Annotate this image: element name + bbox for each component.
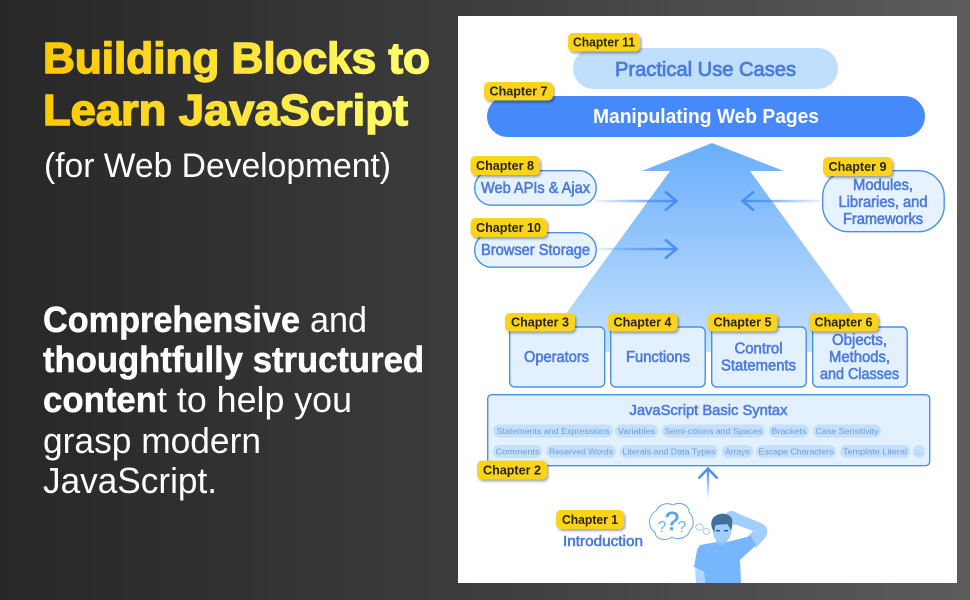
description text block: thoughtfully structured — [43, 339, 424, 380]
arrow: web apis — [596, 192, 676, 210]
tag: chapter 9: Chapter 9 — [828, 160, 887, 174]
pill: browser storage — [475, 233, 596, 267]
tag: chapter 10 — [470, 218, 547, 237]
box: javascript basic syntax — [488, 395, 930, 466]
title: Learn JavaScript — [43, 86, 408, 135]
pill: manipulating web pages: Manipulating Web Pages — [593, 105, 819, 128]
box: operators — [510, 327, 605, 387]
tag: chapter 8: Chapter 8 — [476, 159, 534, 173]
subtitle: (for Web Development) — [44, 147, 391, 185]
pill: modules, libraries, frameworks — [823, 171, 944, 232]
box: control statements: Control — [734, 340, 782, 358]
box: objects, methods, classes — [813, 327, 907, 387]
chips: row one: Case Sensitivity — [816, 426, 879, 436]
icon: thought cloud: ? — [665, 506, 679, 536]
description text block: t to help you — [157, 379, 352, 420]
big upward arrow — [538, 143, 882, 352]
box: objects, methods, classes: and Classes — [820, 366, 899, 383]
tag: chapter 4 — [608, 313, 678, 332]
box: objects, methods, classes: Methods, — [829, 349, 890, 366]
tag: chapter 1: Chapter 1 — [562, 513, 618, 527]
tag: chapter 2: Chapter 2 — [483, 464, 541, 478]
icon: thought cloud: ? — [678, 519, 687, 536]
pill: manipulating web pages — [487, 96, 925, 137]
chips: row two — [493, 445, 925, 458]
chips: row two: ... — [915, 446, 923, 456]
pill: web apis and ajax — [475, 171, 596, 205]
box: control statements: Statements — [721, 358, 796, 374]
box: operators: Operators — [524, 349, 589, 366]
tag: chapter 9 — [823, 157, 892, 176]
tag: chapter 11: Chapter 11 — [573, 36, 635, 50]
chips: row two: Reserved Words — [549, 446, 613, 456]
title — [43, 34, 430, 135]
arrow: browser storage — [596, 240, 676, 258]
box: objects, methods, classes: Objects, — [832, 332, 887, 349]
chips: row two: Escape Characters — [758, 446, 834, 456]
chips: row one: Statements and Expressions — [496, 426, 610, 436]
chips: row two: Arrays — [725, 446, 750, 456]
chips: row one: Semi-colons and Spaces — [664, 426, 762, 436]
box: javascript basic syntax: JavaScript Basic Syntax — [630, 402, 788, 419]
pill: browser storage: Browser Storage — [481, 242, 590, 259]
box: control statements — [712, 327, 806, 387]
arrow: introduction to syntax — [698, 468, 718, 499]
title: Building Blocks to — [43, 34, 430, 83]
chips: row two: Comments — [496, 446, 540, 456]
description text block: grasp modern — [43, 420, 261, 461]
tag: chapter 5: Chapter 5 — [714, 316, 772, 330]
chips: row one: Variables — [618, 426, 655, 436]
pill: modules, libraries, frameworks: Frameworks — [843, 211, 923, 228]
tag: chapter 1 — [556, 510, 624, 529]
panel: learning diagram — [458, 16, 957, 583]
pill: modules, libraries, frameworks: Libraries, and — [838, 194, 928, 211]
chips: row one: Brackets — [772, 426, 806, 436]
chips: row two: Literals and Data Types — [622, 446, 716, 456]
pill: web apis and ajax: Web APIs & Ajax — [481, 180, 590, 197]
chips: row two: Template Literal — [843, 446, 907, 456]
tag: chapter 6: Chapter 6 — [814, 316, 873, 330]
description text block — [43, 299, 424, 501]
icon: thought cloud — [650, 503, 710, 539]
arrow: modules — [742, 192, 821, 210]
tag: chapter 11 — [568, 33, 640, 52]
icon: confused person — [694, 511, 767, 583]
tag: chapter 5 — [708, 313, 778, 332]
description text block: Comprehensive — [43, 299, 300, 340]
chips: row one — [493, 424, 881, 438]
box: functions — [611, 327, 705, 387]
description text block: JavaScript. — [43, 460, 217, 501]
pill: practical use cases — [573, 48, 838, 89]
tag: chapter 7 — [484, 82, 553, 100]
box: functions: Functions — [626, 349, 690, 366]
tag: chapter 3 — [505, 313, 575, 332]
icon: thought cloud: ? — [658, 519, 667, 536]
introduction label: Introduction — [563, 534, 643, 550]
pill: modules, libraries, frameworks: Modules, — [853, 177, 913, 194]
pill: practical use cases: Practical Use Cases — [615, 58, 796, 81]
description text block: conten — [43, 379, 157, 420]
tag: chapter 10: Chapter 10 — [476, 221, 541, 235]
tag: chapter 3: Chapter 3 — [511, 316, 569, 330]
tag: chapter 7: Chapter 7 — [490, 84, 548, 98]
tag: chapter 6 — [809, 313, 878, 332]
tag: chapter 2 — [477, 460, 547, 480]
tag: chapter 8 — [470, 156, 540, 175]
tag: chapter 4: Chapter 4 — [614, 316, 672, 330]
description text block: and — [310, 299, 367, 340]
